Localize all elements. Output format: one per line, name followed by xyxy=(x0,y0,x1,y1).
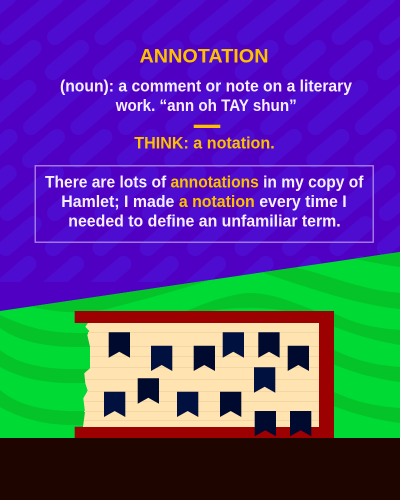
page lines xyxy=(84,332,319,420)
background stripes xyxy=(0,0,400,303)
book cover xyxy=(75,311,334,438)
example sentence: Hamlet; I made a notation every time I xyxy=(61,193,347,211)
example sentence xyxy=(45,174,364,231)
definition xyxy=(60,78,353,115)
example sentence: There are lots of annotations in my copy of xyxy=(45,174,364,192)
title: ANNOTATION xyxy=(140,46,268,67)
green hill xyxy=(0,252,400,440)
book pages with torn edge xyxy=(83,323,319,427)
bookmarks xyxy=(104,332,311,436)
example sentence: needed to define an unfamiliar term. xyxy=(68,213,341,231)
think line: THINK: a notation. xyxy=(134,134,275,152)
hill wave bands xyxy=(0,252,400,425)
example box xyxy=(35,166,373,242)
definition: work. “ann oh TAY shun” xyxy=(115,97,297,115)
definition: (noun): a comment or note on a literary xyxy=(60,78,353,96)
book xyxy=(75,311,334,438)
ground xyxy=(0,438,400,500)
divider dash xyxy=(194,125,220,128)
